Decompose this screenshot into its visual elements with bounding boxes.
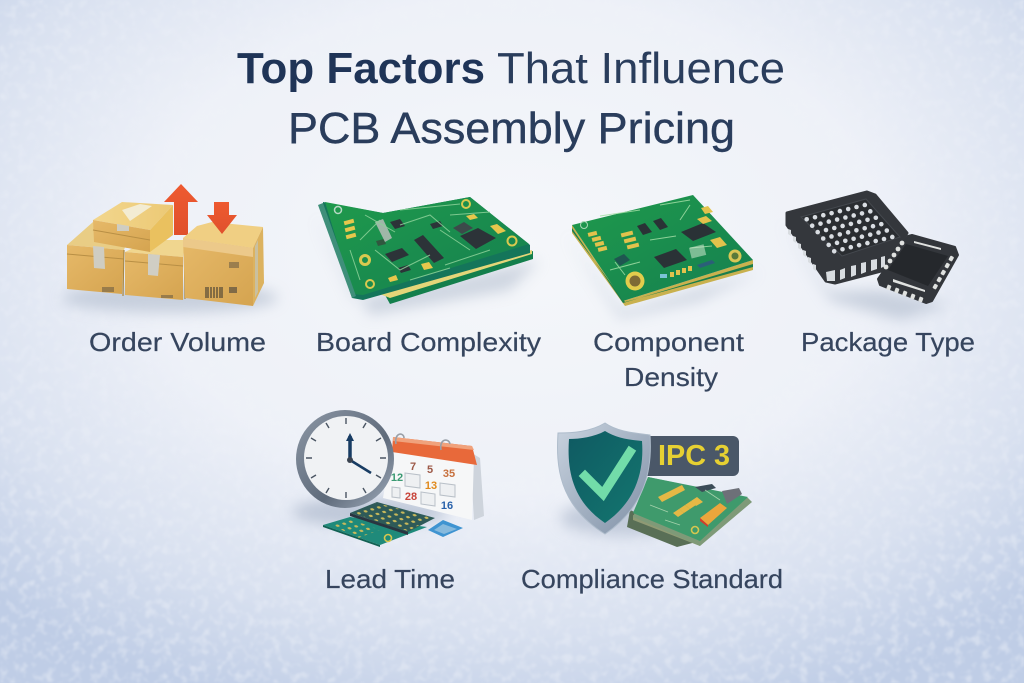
icon: clock, calendar and boards <box>292 410 484 547</box>
label: component density: Density <box>624 362 718 392</box>
small QFN chip <box>878 235 958 303</box>
label: compliance standard: Compliance Standard <box>521 564 783 594</box>
title <box>237 44 785 153</box>
icon: complex circuit board <box>315 197 540 315</box>
title: That Influence <box>497 44 785 93</box>
calendar: 28 <box>405 491 417 503</box>
label: package type: Package Type <box>801 327 975 357</box>
label: board complexity: Board Complexity <box>316 327 541 357</box>
calendar: 5 <box>427 464 433 476</box>
icon: dense circuit board <box>565 195 760 318</box>
title: PCB Assembly Pricing <box>288 104 735 153</box>
label: order volume: Order Volume <box>89 327 266 357</box>
circuit modules <box>323 502 463 547</box>
calendar: 7 <box>410 461 416 473</box>
badge: IPC 3 <box>640 436 739 476</box>
calendar: 12 <box>391 472 403 484</box>
calendar: 16 <box>441 500 453 512</box>
icon: cardboard boxes with volume arrows <box>62 184 278 313</box>
label: component density: Component <box>593 327 745 357</box>
calendar: 35 <box>443 468 455 480</box>
large BGA chip <box>787 192 907 283</box>
calendar <box>383 434 484 520</box>
badge: IPC 3: IPC 3 <box>658 440 730 472</box>
label: lead time: Lead Time <box>325 564 455 594</box>
shield <box>558 423 650 534</box>
label: component density <box>593 327 745 392</box>
compliance board <box>627 477 752 547</box>
icon: compliance shield with board <box>558 423 752 547</box>
calendar: 13 <box>425 480 437 492</box>
clock <box>296 410 394 508</box>
title: Top Factors <box>237 44 485 93</box>
icon: chip packages <box>780 192 958 320</box>
